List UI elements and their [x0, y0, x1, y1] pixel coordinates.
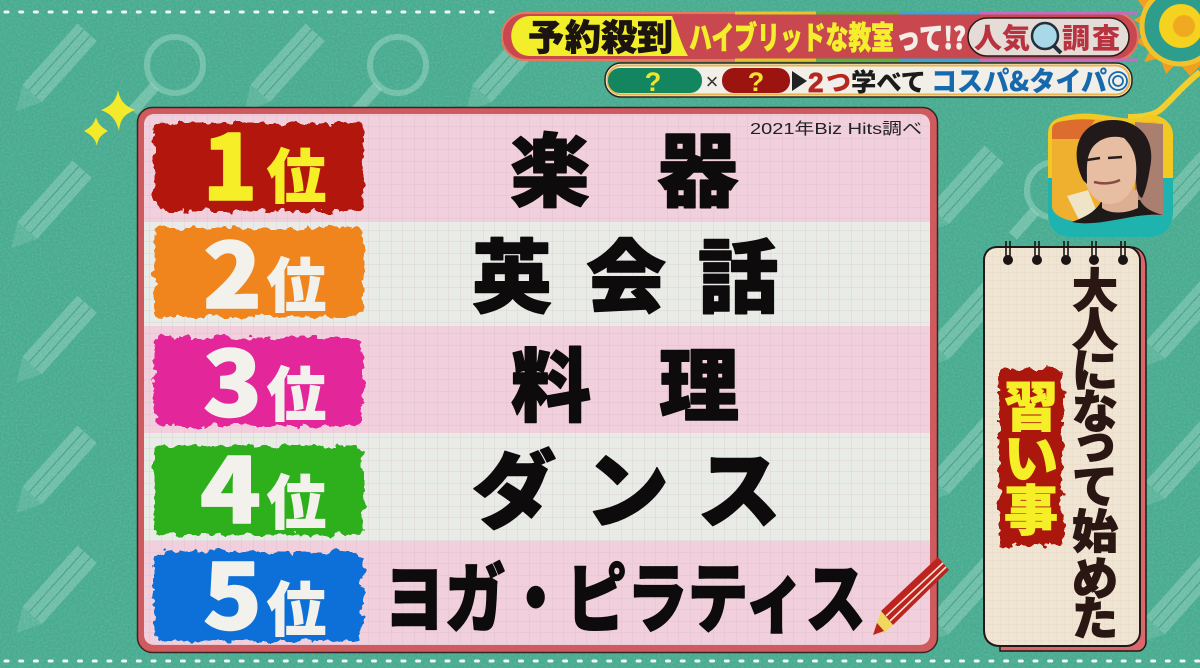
text: ハイブリッドな教室って!?: って!?: [896, 14, 966, 58]
panel: ranking: [138, 96, 938, 655]
icon: sun: [1128, 0, 1200, 117]
item: 英会話: 英会話: [472, 214, 778, 330]
header: sub title bar: [605, 60, 1132, 99]
text: ハイブリッドな教室って!?: ハイブリッドな教室: [689, 13, 894, 59]
icon: magnifier: [1032, 23, 1061, 53]
paper behind presenter: [1067, 190, 1097, 222]
badge: rank 1: 1: [203, 96, 257, 226]
item: ダンス: ダンス: [472, 425, 781, 546]
icon: arrow: [792, 71, 807, 91]
pill: green question: [608, 67, 702, 97]
pill: green question: ?: [645, 67, 661, 97]
label: yellow tag: [511, 16, 688, 56]
badge: rank 2: [154, 204, 363, 334]
badge: rank 3: 位: [267, 348, 326, 433]
badge: rank 5: 5: [203, 525, 262, 655]
text: 2つ学べてコスパ&タイパ◎: つ: [826, 63, 851, 99]
pill: red question: ?: [748, 67, 764, 97]
row 4: [154, 419, 781, 549]
pill: red question: [722, 67, 790, 97]
row 2: [154, 204, 778, 334]
badge: rank 4: [154, 419, 363, 549]
badge: rank 1: 位: [267, 130, 326, 215]
badge: rank 5: [154, 525, 363, 655]
text: 2つ学べてコスパ&タイパ◎: コスパ&タイパ: [931, 60, 1107, 99]
header: top title bar: [502, 9, 1138, 61]
row 1: [154, 96, 738, 226]
badge: rank 2: 2: [203, 204, 262, 334]
badge: rank 4: 4: [200, 419, 261, 549]
text: 2つ学べてコスパ&タイパ◎: 学べて: [851, 63, 926, 99]
badge: rank 2: 位: [267, 239, 326, 324]
icon: red pencil: [873, 557, 949, 635]
text: 2つ学べてコスパ&タイパ◎: 2: [808, 67, 824, 98]
text: 予約殺到: 予約殺到: [528, 9, 673, 61]
panel: notebook: [984, 241, 1146, 651]
text: 2つ学べてコスパ&タイパ◎: [808, 60, 1127, 99]
photo: presenter: [1048, 113, 1173, 237]
badge: rank 3: 3: [203, 312, 262, 442]
badge: rank 1: [154, 96, 363, 226]
pill: 人気調査: [968, 17, 1129, 57]
row 5: [154, 525, 866, 655]
item: 料理: 料理: [511, 323, 739, 439]
spiral rings: [1003, 241, 1128, 265]
item: ヨガ・ピラティス: ヨガ・ピラティス: [384, 538, 866, 648]
item: 楽器: 楽器: [510, 108, 738, 224]
row 3: [154, 312, 739, 442]
badge: rank 4: 位: [267, 456, 326, 541]
pill: 人気調査: 調査: [1062, 17, 1120, 57]
text: times: ×: [706, 69, 718, 94]
badge: rank 5: 位: [267, 563, 326, 648]
badge: rank 3: [154, 312, 363, 442]
vertical title: 大人になって始めた: [1072, 255, 1118, 649]
badge: 習い事: 習い事: [1004, 363, 1058, 546]
icon: sparkles: [84, 90, 135, 146]
source note: 2021年Biz Hits調べ: [750, 120, 922, 138]
icon: double circle: [1109, 72, 1127, 90]
pill: 人気調査: 人気: [974, 17, 1030, 57]
